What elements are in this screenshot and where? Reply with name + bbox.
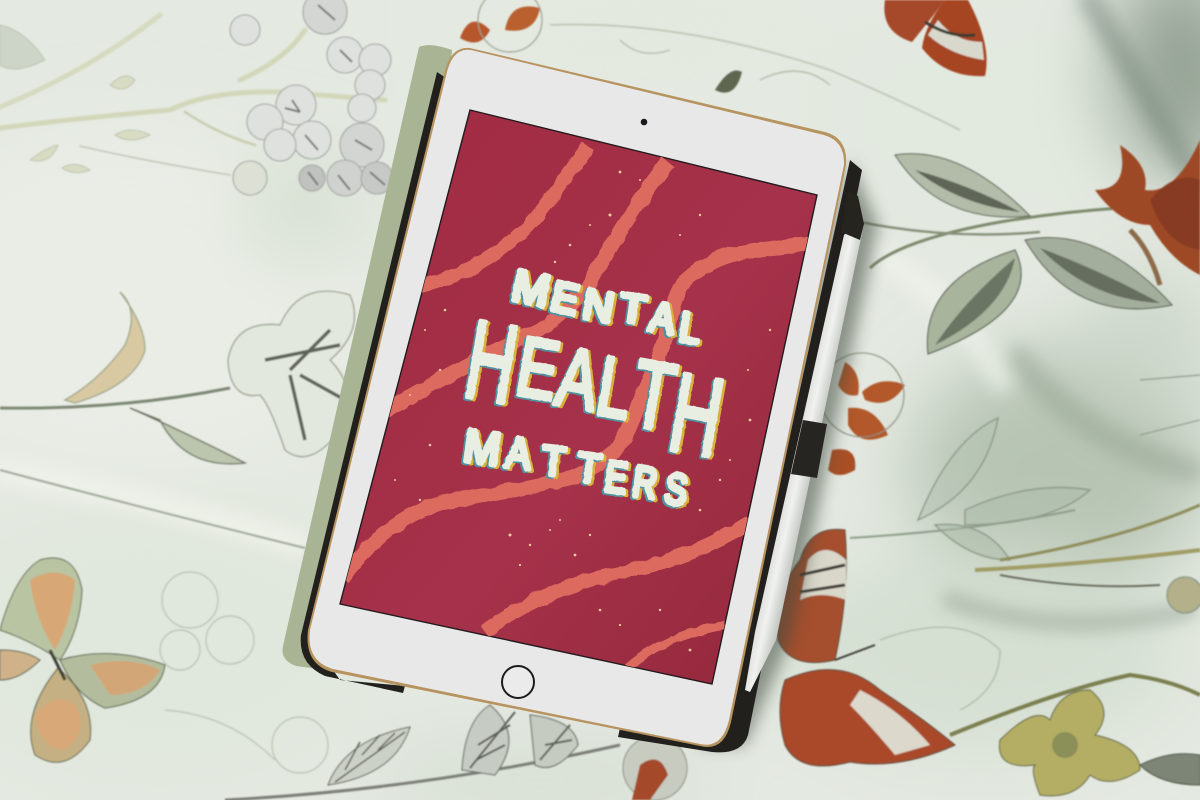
floral print: top centre flowers xyxy=(460,0,960,130)
pencil elastic band xyxy=(791,420,827,478)
gold sparkles on screen xyxy=(394,171,771,651)
salmon wavy bands on screen xyxy=(342,146,810,668)
word: MENTAL: N xyxy=(579,280,618,331)
word: HEALTH: H xyxy=(457,295,527,428)
word: MENTAL xyxy=(508,261,704,353)
floral print: bottom faint flowers xyxy=(160,572,328,773)
word: MENTAL: T xyxy=(617,285,649,332)
tablet body xyxy=(308,48,846,747)
flower and stem: bottom right xyxy=(950,675,1200,796)
word: MATTERS: M xyxy=(461,419,504,476)
top-left blossoms xyxy=(230,0,393,196)
word: HEALTH: E xyxy=(510,319,566,419)
leaf sprig: bottom xyxy=(225,705,687,800)
green leather case xyxy=(283,45,452,680)
leaf sprig: right with red flower xyxy=(860,140,1200,354)
floral print: left large flower xyxy=(0,291,354,548)
screen xyxy=(340,110,817,684)
screen lettering: Mental Health Matters xyxy=(457,261,732,516)
word: MATTERS: T xyxy=(574,444,604,493)
butterfly: bottom right xyxy=(778,529,1000,766)
word: MENTAL: E xyxy=(547,272,583,324)
word: HEALTH: A xyxy=(550,329,606,429)
top-left leaves xyxy=(0,25,150,173)
word: MATTERS: S xyxy=(662,465,690,516)
tablet xyxy=(308,48,846,747)
apple pencil xyxy=(745,192,864,692)
blossom markings xyxy=(285,5,385,190)
butterfly: top right xyxy=(884,0,987,76)
word: MENTAL: A xyxy=(646,294,679,344)
floral print: right faint leaves xyxy=(850,375,1200,613)
shadow beside tablet and pencil xyxy=(700,160,878,745)
small red flower beside the pencil xyxy=(820,353,905,475)
word: MENTAL: L xyxy=(676,304,704,353)
word: MATTERS: E xyxy=(602,453,630,504)
home button xyxy=(502,666,534,698)
word: MATTERS: R xyxy=(630,457,660,509)
word: HEALTH: H xyxy=(661,349,732,481)
word: MENTAL: M xyxy=(508,261,554,317)
dark case edge xyxy=(301,72,862,752)
word: MATTERS: A xyxy=(503,427,534,479)
floral print: top-left branches xyxy=(0,15,385,175)
word: HEALTH xyxy=(457,295,732,481)
camera xyxy=(641,119,647,125)
butterfly: bottom left xyxy=(0,558,165,762)
word: HEALTH: T xyxy=(624,339,683,452)
word: MATTERS: T xyxy=(539,437,568,485)
word: MATTERS xyxy=(461,419,690,516)
word: HEALTH: L xyxy=(590,338,640,437)
